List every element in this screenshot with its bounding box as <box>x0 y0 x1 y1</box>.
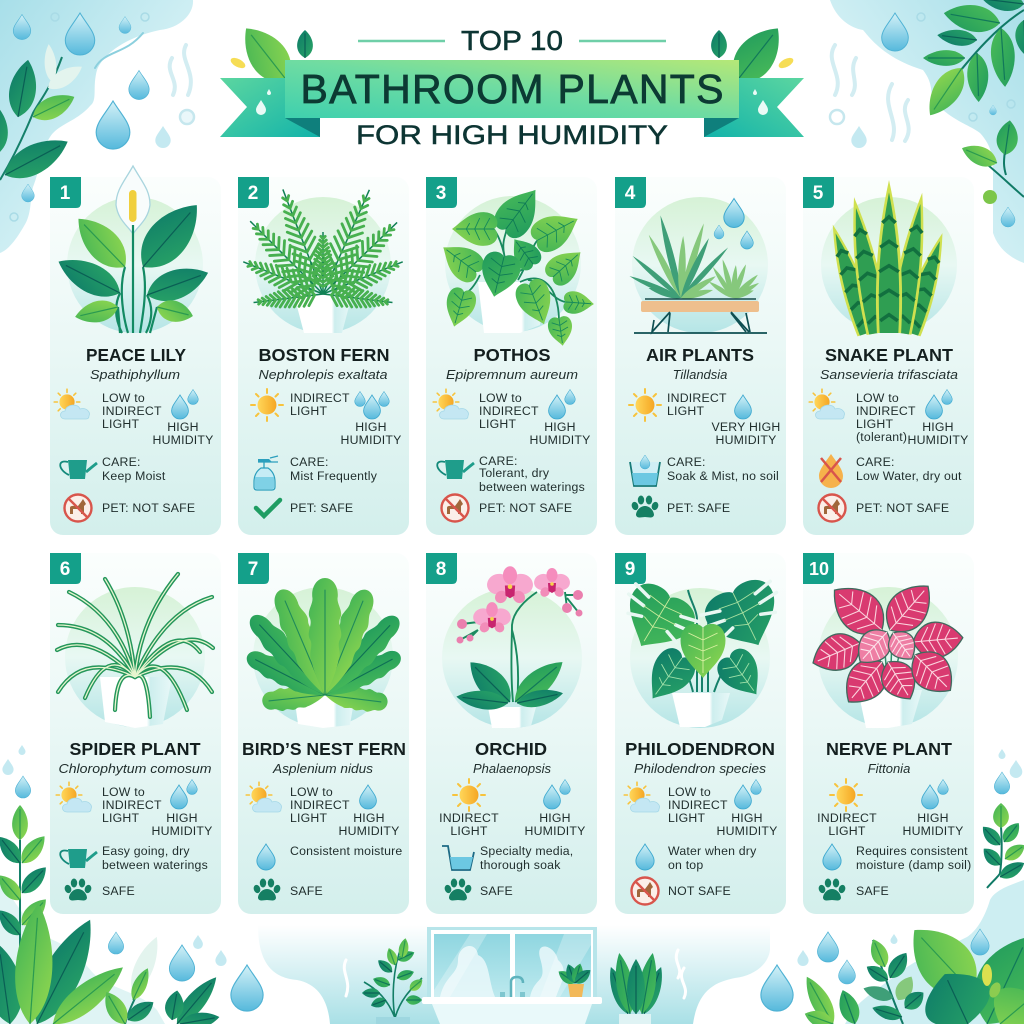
care text: Tolerant, dry <box>479 466 550 480</box>
care text: thorough soak <box>480 858 561 872</box>
care text: Requires consistent <box>856 844 968 858</box>
light text: INDIRECT <box>290 798 350 812</box>
icon: not pet safe <box>632 878 658 904</box>
scientific name: Tillandsia <box>673 367 727 382</box>
icon: humidity <box>549 390 575 419</box>
number badge 9 <box>615 553 646 584</box>
icon: water basin <box>630 455 660 486</box>
icon: spray bottle <box>254 456 278 490</box>
pet text: SAFE <box>102 884 135 898</box>
title lines <box>358 40 666 42</box>
icon: humidity <box>360 785 376 809</box>
plant illustration <box>242 578 406 728</box>
number badge 5: 5 <box>813 183 824 204</box>
icon: humidity <box>735 395 751 419</box>
humidity text: HIGH <box>922 420 954 434</box>
icon: paw <box>253 878 281 900</box>
title: top 10: TOP 10 <box>461 25 563 56</box>
light text: LOW to <box>102 785 145 799</box>
icon: humidity <box>926 390 952 419</box>
light text: INDIRECT <box>439 811 499 825</box>
icon: not pet safe <box>442 494 468 522</box>
icon: humidity <box>544 780 570 809</box>
plant illustration <box>57 574 213 728</box>
pet text: PET: NOT SAFE <box>102 501 195 515</box>
icon: humidity <box>922 780 948 809</box>
title: for high humidity: FOR HIGH HUMIDITY <box>356 120 668 150</box>
plant name: BOSTON FERN <box>258 345 390 365</box>
bottom scene: snake plant right <box>344 950 686 1024</box>
light text: INDIRECT <box>102 798 162 812</box>
care text: Low Water, dry out <box>856 469 962 483</box>
number badge 10 <box>803 553 834 584</box>
pet text: PET: NOT SAFE <box>856 501 949 515</box>
light text: INDIRECT <box>856 404 916 418</box>
icon: not pet safe <box>818 494 846 522</box>
icon: low light <box>246 782 281 812</box>
humidity text: HUMIDITY <box>715 433 777 447</box>
light text: LOW to <box>668 785 711 799</box>
light text: INDIRECT <box>667 391 727 405</box>
pet text: PET: NOT SAFE <box>479 501 572 515</box>
icon: sun <box>830 779 862 811</box>
panel: 6 spider plant <box>50 553 221 914</box>
number badge 1: 1 <box>60 183 71 204</box>
humidity text: VERY HIGH <box>711 420 781 434</box>
scientific name: Spathiphyllum <box>90 367 180 382</box>
pet text: PET: SAFE <box>667 501 730 515</box>
plant illustration <box>434 179 595 347</box>
number badge 8 <box>426 553 457 584</box>
humidity text: HUMIDITY <box>907 433 969 447</box>
panel: 10 nerve plant <box>803 553 974 914</box>
care text: CARE: <box>667 455 706 469</box>
icon: check <box>256 500 280 516</box>
scientific name: Chlorophytum comosum <box>58 761 212 776</box>
number badge 7: 7 <box>248 559 258 580</box>
icon: paw <box>631 496 659 518</box>
light text: (tolerant) <box>856 430 907 444</box>
humidity text: HIGH <box>166 811 198 825</box>
humidity text: HIGH <box>544 420 576 434</box>
care text: Consistent moisture <box>290 844 402 858</box>
care text: moisture (damp soil) <box>856 858 971 872</box>
number badge 7 <box>238 553 269 584</box>
icon: moisture drop <box>823 844 841 870</box>
number badge 5 <box>803 177 834 208</box>
plant name: NERVE PLANT <box>826 739 952 759</box>
panel: 9 philodendron <box>609 553 794 914</box>
scientific name: Epipremnum aureum <box>446 367 578 382</box>
foliage: top-right branch <box>919 0 1024 204</box>
light text: LIGHT <box>668 811 706 825</box>
plant illustration <box>609 571 794 728</box>
title banner <box>220 17 804 150</box>
humidity text: HUMIDITY <box>338 824 400 838</box>
icon: sun <box>629 389 661 421</box>
foliage: bottom-left plants <box>0 805 223 1024</box>
plant illustration <box>239 184 407 333</box>
scientific name: Sansevieria trifasciata <box>820 367 958 382</box>
humidity text: HIGH <box>539 811 571 825</box>
icon: paw <box>64 878 92 900</box>
plant illustration <box>821 180 957 337</box>
panel: 8 orchid <box>426 553 597 914</box>
icon: not pet safe <box>64 494 92 522</box>
care text: Mist Frequently <box>290 469 378 483</box>
icon: low light <box>624 782 659 812</box>
number badge 4 <box>615 177 646 208</box>
humidity text: HIGH <box>167 420 199 434</box>
light text: LIGHT <box>667 404 705 418</box>
foliage: bottom-right plants <box>799 803 1024 1024</box>
icon: sun <box>453 779 485 811</box>
humidity text: HUMIDITY <box>151 824 213 838</box>
care text: between waterings <box>102 858 208 872</box>
light text: LIGHT <box>479 417 517 431</box>
light text: INDIRECT <box>102 404 162 418</box>
humidity text: HUMIDITY <box>902 824 964 838</box>
light text: LIGHT <box>828 824 866 838</box>
number badge 6 <box>50 553 81 584</box>
number badge 9: 9 <box>625 559 635 580</box>
number badge 8: 8 <box>436 559 446 580</box>
humidity text: HUMIDITY <box>524 824 586 838</box>
title: bathroom plants: BATHROOM PLANTS <box>300 66 724 112</box>
plant illustration <box>442 566 583 728</box>
pet text: SAFE <box>480 884 513 898</box>
icon: low light <box>56 782 91 812</box>
number badge 4: 4 <box>625 183 636 204</box>
panel: 7 bird's nest fern <box>238 553 409 914</box>
light text: LIGHT <box>290 811 328 825</box>
number badge 3 <box>426 177 457 208</box>
ribbon band <box>285 60 739 118</box>
banner leaves <box>229 17 795 93</box>
plant illustration <box>806 574 964 728</box>
care text: CARE: <box>102 455 141 469</box>
scientific name: Nephrolepis exaltata <box>258 367 388 382</box>
number badge 1 <box>50 177 81 208</box>
light text: LIGHT <box>102 811 140 825</box>
humidity text: HIGH <box>731 811 763 825</box>
light text: INDIRECT <box>290 391 350 405</box>
light text: LOW to <box>479 391 522 405</box>
icon: sun <box>251 389 283 421</box>
care text: CARE: <box>290 455 329 469</box>
humidity text: HUMIDITY <box>340 433 402 447</box>
humidity text: HIGH <box>917 811 949 825</box>
care text: CARE: <box>479 454 518 468</box>
plant name: ORCHID <box>475 739 547 759</box>
icon: low light <box>54 389 89 419</box>
scientific name: Philodendron species <box>634 761 767 776</box>
bottom scene: potted plant left <box>362 937 425 1024</box>
icon: humidity <box>171 780 197 809</box>
pet text: SAFE <box>290 884 323 898</box>
foliage: top-left branch <box>0 44 86 188</box>
plant name: AIR PLANTS <box>646 345 754 365</box>
care text: between waterings <box>479 480 585 494</box>
light text: INDIRECT <box>479 404 539 418</box>
bottom scene: bathroom window and sink <box>422 927 602 1024</box>
pet text: SAFE <box>856 884 889 898</box>
scientific name: Asplenium nidus <box>272 761 374 776</box>
plant name: POTHOS <box>474 345 550 365</box>
plant name: SPIDER PLANT <box>70 739 201 759</box>
light text: LIGHT <box>290 404 328 418</box>
light text: LOW to <box>856 391 899 405</box>
icon: watering can <box>437 460 474 479</box>
number badge 6: 6 <box>60 559 70 580</box>
icon: orchid media pot <box>442 846 474 870</box>
panel: 5 snake plant <box>803 177 974 535</box>
plant name: SNAKE PLANT <box>825 345 953 365</box>
icon: low water <box>819 454 843 488</box>
pet text: NOT SAFE <box>668 884 731 898</box>
light text: LIGHT <box>102 417 140 431</box>
care text: Water when dry <box>668 844 756 858</box>
humidity text: HIGH <box>355 420 387 434</box>
light text: LOW to <box>102 391 145 405</box>
icon: moisture drop <box>257 844 275 870</box>
care text: Keep Moist <box>102 469 166 483</box>
panel: 2 boston fern <box>238 177 409 535</box>
care text: Easy going, dry <box>102 844 190 858</box>
number badge 2 <box>238 177 269 208</box>
scientific name: Phalaenopsis <box>473 761 552 776</box>
icon: paw <box>444 878 472 900</box>
plant name: PEACE LILY <box>86 345 186 365</box>
icon: moisture drop <box>636 844 654 870</box>
icon: low light <box>433 389 468 419</box>
plant illustration <box>52 166 213 333</box>
number badge 10: 10 <box>809 559 829 579</box>
icon: paw <box>818 878 846 900</box>
care text: on top <box>668 858 703 872</box>
scientific name: Fittonia <box>868 761 910 776</box>
icon: humidity <box>355 392 389 419</box>
humidity text: HUMIDITY <box>529 433 591 447</box>
number badge 3: 3 <box>436 183 446 204</box>
icon: low light <box>809 389 844 419</box>
light text: LIGHT <box>856 417 894 431</box>
light text: LOW to <box>290 785 333 799</box>
ribbon tails <box>220 78 804 137</box>
plant name: BIRD’S NEST FERN <box>242 739 406 759</box>
number badge 2: 2 <box>248 183 258 204</box>
humidity text: HUMIDITY <box>716 824 778 838</box>
icon: humidity <box>172 390 198 419</box>
pet text: PET: SAFE <box>290 501 353 515</box>
plant name: PHILODENDRON <box>625 739 775 759</box>
light text: INDIRECT <box>668 798 728 812</box>
icon: humidity <box>735 780 761 809</box>
panel: 4 air plants <box>615 177 786 535</box>
panel: 3 pothos <box>426 177 597 535</box>
humidity text: HIGH <box>353 811 385 825</box>
plant illustration <box>628 197 768 333</box>
light text: INDIRECT <box>817 811 877 825</box>
icon: watering can <box>60 849 97 868</box>
care text: CARE: <box>856 455 895 469</box>
light text: LIGHT <box>450 824 488 838</box>
panel: 1 peace lily <box>50 166 221 535</box>
care text: Soak & Mist, no soil <box>667 469 779 483</box>
humidity text: HUMIDITY <box>152 433 214 447</box>
care text: Specialty media, <box>480 844 573 858</box>
icon: watering can <box>60 460 97 479</box>
